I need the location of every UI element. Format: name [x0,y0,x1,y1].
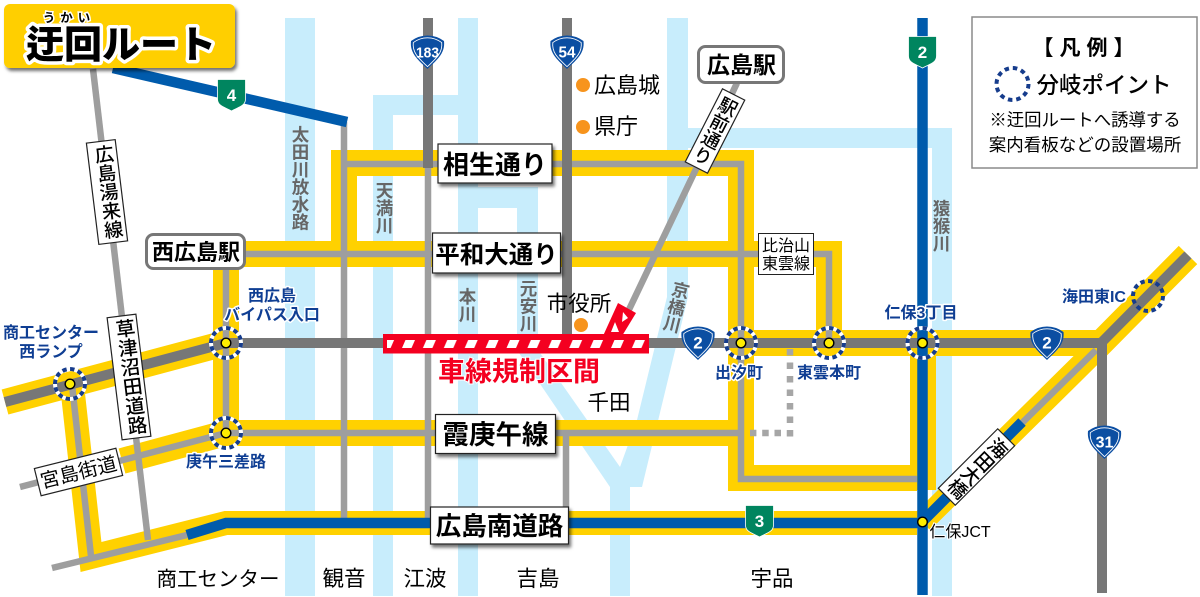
shield: route 54 [550,36,584,69]
広島城: 広島城 [594,73,660,98]
shield: expressway 2 [908,36,936,68]
shield: expressway 3 [746,506,774,537]
西広島駅 [146,234,244,268]
shield: route 2 west: 2 [693,334,703,352]
legend heading: 【凡例】 [1032,37,1140,60]
branch point labels: 出汐町 [715,364,763,382]
西広島バイパス入口 ring [211,328,241,358]
legend [972,17,1197,168]
比治山東雲線 [758,234,814,274]
blue expressways [113,18,1022,595]
road label boxes [34,46,1015,544]
branch point labels: 西ランプ [19,343,83,361]
branch point labels: 仁保3丁目 [885,304,957,322]
観音: 観音 [322,567,366,591]
branch point labels: バイパス入口 [224,306,320,324]
東雲本町 ring [814,328,844,358]
gray roads [20,69,1096,568]
branch point labels: 商工センター [3,324,99,342]
shield: expressway 4 [218,80,246,111]
title: 迂回ルート [26,25,216,67]
吉島: 吉島 [516,567,560,591]
平和大通り: 平和大通り [435,241,558,269]
legend ring label: 分岐ポイント [1036,73,1172,98]
legend note: ※迂回ルートへ誘導する [989,110,1181,130]
river labels: 本川 [457,288,477,322]
広島駅: 広島駅 [707,52,776,78]
宇品: 宇品 [750,567,794,591]
西広島駅: 西広島駅 [152,240,240,265]
shield: route 183: 183 [416,44,439,62]
仁保JCT dot [918,517,927,527]
branch point labels [3,286,1126,471]
相生通り: 相生通り [443,150,547,180]
仁保3丁目 ring [908,328,938,358]
place names [156,73,991,591]
商工センター西ランプ ring [55,369,85,399]
label: 車線規制区間: 車線規制区間 [438,357,600,387]
広島湯来線: 広島湯来線 [91,143,124,240]
river labels: 猿猴川 [931,200,951,252]
商工センター: 商工センター [156,568,280,591]
river labels [290,126,951,335]
yellow detour routes [5,163,1188,557]
広島南道路 [430,507,568,544]
千田: 千田 [587,391,631,415]
宮島街道: 宮島街道 [38,453,119,493]
比治山東雲線: 比治山 [762,237,810,255]
霞庚午線: 霞庚午線 [442,420,549,450]
title: うかい [43,11,95,25]
草津沼田道路: 草津沼田道路 [111,318,148,436]
shield: route 31: 31 [1096,434,1114,452]
restricted lane section [383,303,649,354]
市役所 [547,292,611,332]
branch points [55,281,1163,527]
駅前通り: 駅前通り [689,93,741,169]
広島駅 [698,46,784,82]
shield: expressway 4: 4 [227,86,237,105]
legend: 案内看板などの設置場所 [989,135,1181,155]
県庁: 県庁 [594,114,638,139]
title [4,4,235,68]
branch point labels: 東雲本町 [797,363,861,382]
江波: 江波 [403,567,447,591]
広島南道路: 広島南道路 [436,513,564,541]
shield: expressway 2: 2 [918,43,927,62]
海田大橋: 海田大橋 [942,433,1011,502]
shield: route 183 [411,36,444,69]
shield: expressway 3: 3 [755,512,764,531]
仁保JCT: 仁保JCT [929,523,991,541]
river labels: 元安川 [518,280,538,332]
river labels: 天満川 [374,182,394,234]
庚午三差路 ring [211,418,241,448]
river labels: 太田川放水路 [290,126,310,230]
市役所: 市役所 [547,292,611,316]
rivers [285,18,952,596]
branch point labels: 海田東IC [1062,287,1126,306]
shield: route 2 east: 2 [1042,334,1052,352]
branch point labels: 庚午三差路 [186,452,266,471]
平和大通り [432,233,560,273]
branch point labels: 西広島 [248,286,296,305]
legend ring icon [996,68,1028,100]
海田東IC ring [1133,281,1163,311]
出汐町 ring [726,328,756,358]
road shields [218,36,1121,537]
shield: route 54: 54 [558,44,576,62]
霞庚午線 [436,414,556,454]
比治山東雲線: 東雲線 [762,255,810,273]
river labels: 京橋川 [660,279,692,335]
shield: route 2 west [681,326,715,360]
shield: route 31 [1088,426,1121,459]
shield: route 2 east [1030,326,1064,360]
dotted road [750,349,790,437]
